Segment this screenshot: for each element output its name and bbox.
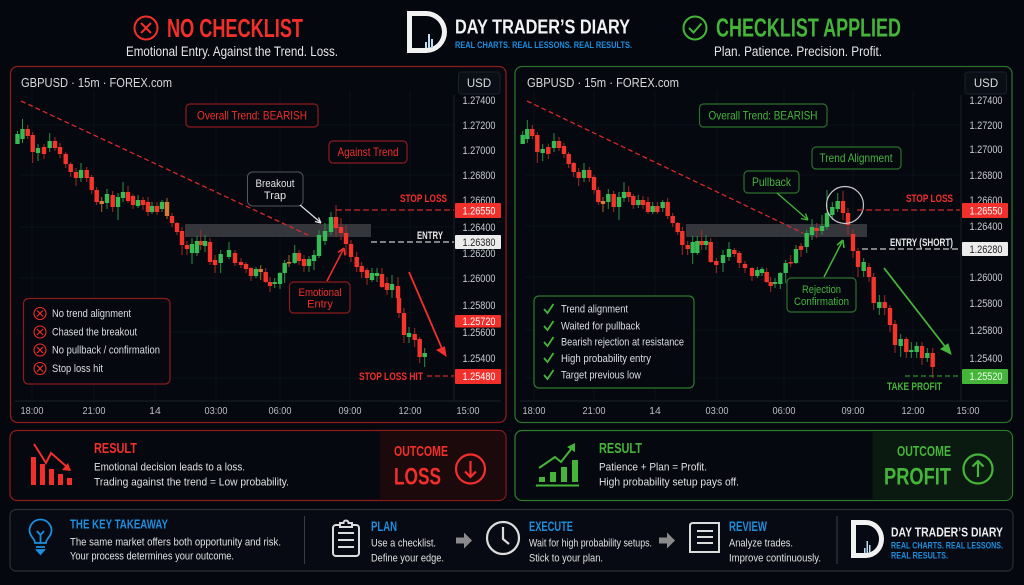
item: target previous low: Target previous low (561, 370, 641, 382)
currency box (965, 72, 1006, 94)
price axis: 1.26000 (462, 273, 496, 285)
price axis: 1.26600 (462, 195, 496, 207)
stop loss hit level: STOP LOSS HIT (359, 371, 423, 383)
time axis: 15:00 (456, 405, 480, 417)
item: stop loss hit (34, 362, 103, 375)
takeaway text (70, 536, 281, 562)
stop loss level: STOP LOSS (906, 193, 953, 205)
take profit level (887, 369, 1008, 393)
time axis: 18:00 (20, 405, 44, 417)
entry level (371, 230, 501, 249)
result text: Trading against the trend = Low probability. (94, 476, 289, 488)
review text: Improve continuously. (729, 552, 821, 564)
stop loss level (336, 193, 501, 218)
footer logo (851, 520, 1003, 562)
label: against trend (329, 141, 407, 163)
resistance zone (686, 224, 867, 237)
label: pullback: Pullback (752, 175, 792, 189)
icon: x in circle (134, 16, 158, 40)
callout: breakout trap (248, 172, 303, 206)
plan heading: PLAN (371, 519, 397, 534)
arrow: execute to review (659, 532, 675, 548)
brand tagline: REAL RESULTS. (891, 550, 948, 562)
icon: clipboard (333, 520, 359, 556)
item: no trend alignment (34, 308, 131, 320)
time axis: 03:00 (204, 405, 228, 417)
outcome value: PROFIT (884, 464, 951, 490)
arrow: breakout trap (300, 205, 321, 223)
currency box: USD (974, 78, 998, 90)
price axis: 1.25400 (462, 353, 496, 365)
callout: emotional entry (290, 282, 350, 313)
arrow: emotional entry (327, 248, 345, 281)
price axis: 1.27200 (970, 120, 1002, 132)
icon: up arrow circle (964, 454, 992, 484)
callout: rejection confirmation: Rejection (802, 284, 841, 296)
icon: check in circle (684, 16, 706, 40)
icon: D logo (407, 11, 447, 53)
price axis: 1.25800 (462, 300, 496, 312)
price axis: 1.26000 (970, 272, 1002, 284)
callout: rejection confirmation: Confirmation (794, 296, 849, 308)
heading: no checklist: NO CHECKLIST (167, 13, 303, 43)
outcome background (380, 431, 506, 500)
item: chased the breakout: Chased the breakout (52, 326, 137, 338)
label: overall trend (700, 104, 827, 127)
entry level: ENTRY (SHORT) (890, 237, 953, 249)
result text (94, 462, 289, 488)
item: high probability entry: High probability entry (561, 353, 651, 365)
stop loss level (857, 193, 1008, 218)
result text: High probability setup pays off. (599, 476, 739, 488)
takeaway text: The same market offers both opportunity and risk. (70, 536, 281, 548)
stop loss level: STOP LOSS (400, 193, 447, 205)
time axis: 12:00 (902, 405, 925, 417)
take profit level: 1.25520 (970, 371, 1002, 383)
price axis: 1.26400 (462, 222, 496, 234)
price axis (970, 95, 1002, 365)
header logo (407, 11, 632, 53)
time axis: 14 (649, 405, 661, 417)
checklist: mistakes (24, 298, 170, 384)
price axis: 1.26400 (970, 221, 1002, 233)
time axis: 03:00 (706, 405, 729, 417)
item: no pullback: No pullback / confirmation (52, 344, 160, 356)
currency box (458, 72, 500, 94)
result text: Patience + Plan = Profit. (599, 462, 707, 474)
price axis: 1.27400 (970, 95, 1002, 107)
item: chased the breakout (34, 326, 137, 338)
arrow: downward move (409, 272, 446, 356)
callout: breakout trap: Breakout (256, 178, 294, 190)
price axis: 1.25800 (970, 298, 1002, 310)
item: bearish rejection: Bearish rejection at resistance (561, 336, 684, 348)
entry level (862, 237, 1008, 256)
label: overall trend (186, 104, 318, 127)
chart title: GBPUSD · 15m · FOREX.com (527, 75, 679, 90)
label: overall trend: Overall Trend: BEARISH (197, 108, 307, 122)
time axis: 06:00 (772, 405, 796, 417)
brand tagline: REAL CHARTS. REAL LESSONS. REAL RESULTS. (455, 40, 632, 51)
review text: Analyze trades. (729, 538, 793, 550)
arrow: pullback (777, 193, 808, 220)
arrow: rejection (824, 240, 844, 277)
candlesticks (18, 119, 425, 367)
execute heading: EXECUTE (529, 519, 573, 534)
label: trend alignment: Trend Alignment (820, 151, 893, 165)
arrow: downward move (884, 268, 951, 354)
header: no checklist (126, 13, 338, 59)
entry level: 1.26380 (462, 237, 496, 249)
panel: key takeaway (10, 510, 1013, 571)
rejection circle (826, 186, 864, 224)
trend line (21, 101, 310, 236)
time axis: 06:00 (268, 405, 292, 417)
panel: right chart (515, 66, 1012, 422)
icon: lightbulb (30, 520, 52, 554)
outcome background (872, 431, 1012, 500)
review text (729, 538, 821, 564)
execute text: Wait for high probability setups. (529, 538, 652, 550)
outcome value: LOSS (394, 464, 441, 490)
panel: loss result (10, 430, 506, 500)
price axis: 1.26200 (462, 248, 496, 260)
item: trend alignment (544, 304, 628, 316)
price axis: 1.27000 (970, 144, 1002, 156)
price chip: 1.25720: 1.25720 (462, 316, 496, 328)
icon: rising chart (536, 443, 579, 486)
label: against trend: Against Trend (338, 145, 398, 159)
panel: left chart (10, 66, 506, 422)
chart title: GBPUSD · 15m · FOREX.com (21, 75, 172, 90)
brand name: DAY TRADER’S DIARY (455, 16, 631, 38)
stop loss hit level (359, 369, 501, 384)
icon: down arrow circle (456, 454, 485, 484)
resistance zone (185, 224, 371, 237)
review heading: REVIEW (729, 519, 767, 534)
price axis: 1.26800 (970, 170, 1002, 182)
price axis: 1.27000 (462, 145, 496, 157)
stop loss level: 1.26550 (462, 206, 496, 218)
checklist: applied (534, 296, 694, 388)
item: no trend alignment: No trend alignment (52, 308, 131, 320)
result text (599, 462, 739, 488)
heading: checklist applied: CHECKLIST APPLIED (716, 12, 901, 42)
time axis: 21:00 (582, 405, 606, 417)
take profit level: TAKE PROFIT (887, 381, 942, 393)
time axis: 15:00 (956, 405, 980, 417)
arrow: plan to execute (456, 532, 472, 548)
icon: falling chart (31, 444, 72, 485)
result heading: RESULT (94, 440, 137, 457)
time axis: 14 (149, 405, 161, 417)
plan text: Use a checklist. (371, 538, 436, 550)
stop loss level: 1.26550 (970, 206, 1002, 218)
execute text (529, 538, 652, 564)
time axis (20, 405, 480, 417)
time axis (522, 405, 980, 417)
entry level: ENTRY (417, 230, 443, 242)
execute text: Stick to your plan. (529, 552, 603, 564)
takeaway text: Your process determines your outcome. (70, 550, 234, 562)
callout: breakout trap: Trap (264, 190, 286, 202)
icon: review document (690, 523, 719, 552)
subtitle: checklist applied: Plan. Patience. Precision. Profit. (714, 44, 882, 59)
outcome label: OUTCOME (897, 443, 951, 460)
currency box: USD (467, 78, 491, 90)
label: pullback (744, 171, 799, 193)
price axis: 1.25400 (970, 353, 1002, 365)
price axis: 1.25800 (970, 325, 1002, 337)
callout: emotional entry: Entry (307, 298, 333, 310)
time axis: 12:00 (398, 405, 422, 417)
time axis: 21:00 (82, 405, 106, 417)
candlesticks (523, 120, 933, 378)
plan text (371, 538, 444, 564)
price axis: 1.27200 (462, 120, 496, 132)
price axis: 1.27400 (462, 95, 496, 107)
result text: Emotional decision leads to a loss. (94, 462, 245, 474)
callout: rejection confirmation (787, 278, 856, 312)
subtitle: no checklist: Emotional Entry. Against the Trend. Loss. (126, 44, 338, 59)
takeaway heading: THE KEY TAKEAWAY (70, 516, 168, 532)
entry level: 1.26280 (970, 244, 1002, 256)
item: trend alignment: Trend alignment (561, 304, 628, 316)
time axis: 18:00 (522, 405, 546, 417)
trend line (527, 101, 803, 233)
label: trend alignment (812, 147, 901, 169)
price axis (462, 95, 496, 365)
brand tagline (891, 540, 1003, 562)
plan text: Define your edge. (371, 552, 444, 564)
stop loss hit level: 1.25480 (462, 371, 496, 383)
time axis: 09:00 (842, 405, 865, 417)
label: overall trend: Overall Trend: BEARISH (708, 108, 818, 122)
item: waited for pullback: Waited for pullback (561, 320, 640, 332)
icon: clock (487, 522, 519, 554)
icon: D logo (851, 520, 884, 558)
outcome label: OUTCOME (394, 443, 448, 460)
result heading: RESULT (599, 440, 642, 457)
price axis: 1.25600 (462, 327, 496, 339)
price axis: 1.26800 (462, 170, 496, 182)
price axis: 1.26600 (970, 195, 1002, 207)
callout: emotional entry: Emotional (298, 287, 342, 299)
item: stop loss hit: Stop loss hit (52, 363, 103, 375)
panel: profit result (515, 430, 1012, 500)
header: checklist applied (684, 12, 901, 59)
time axis: 09:00 (338, 405, 362, 417)
